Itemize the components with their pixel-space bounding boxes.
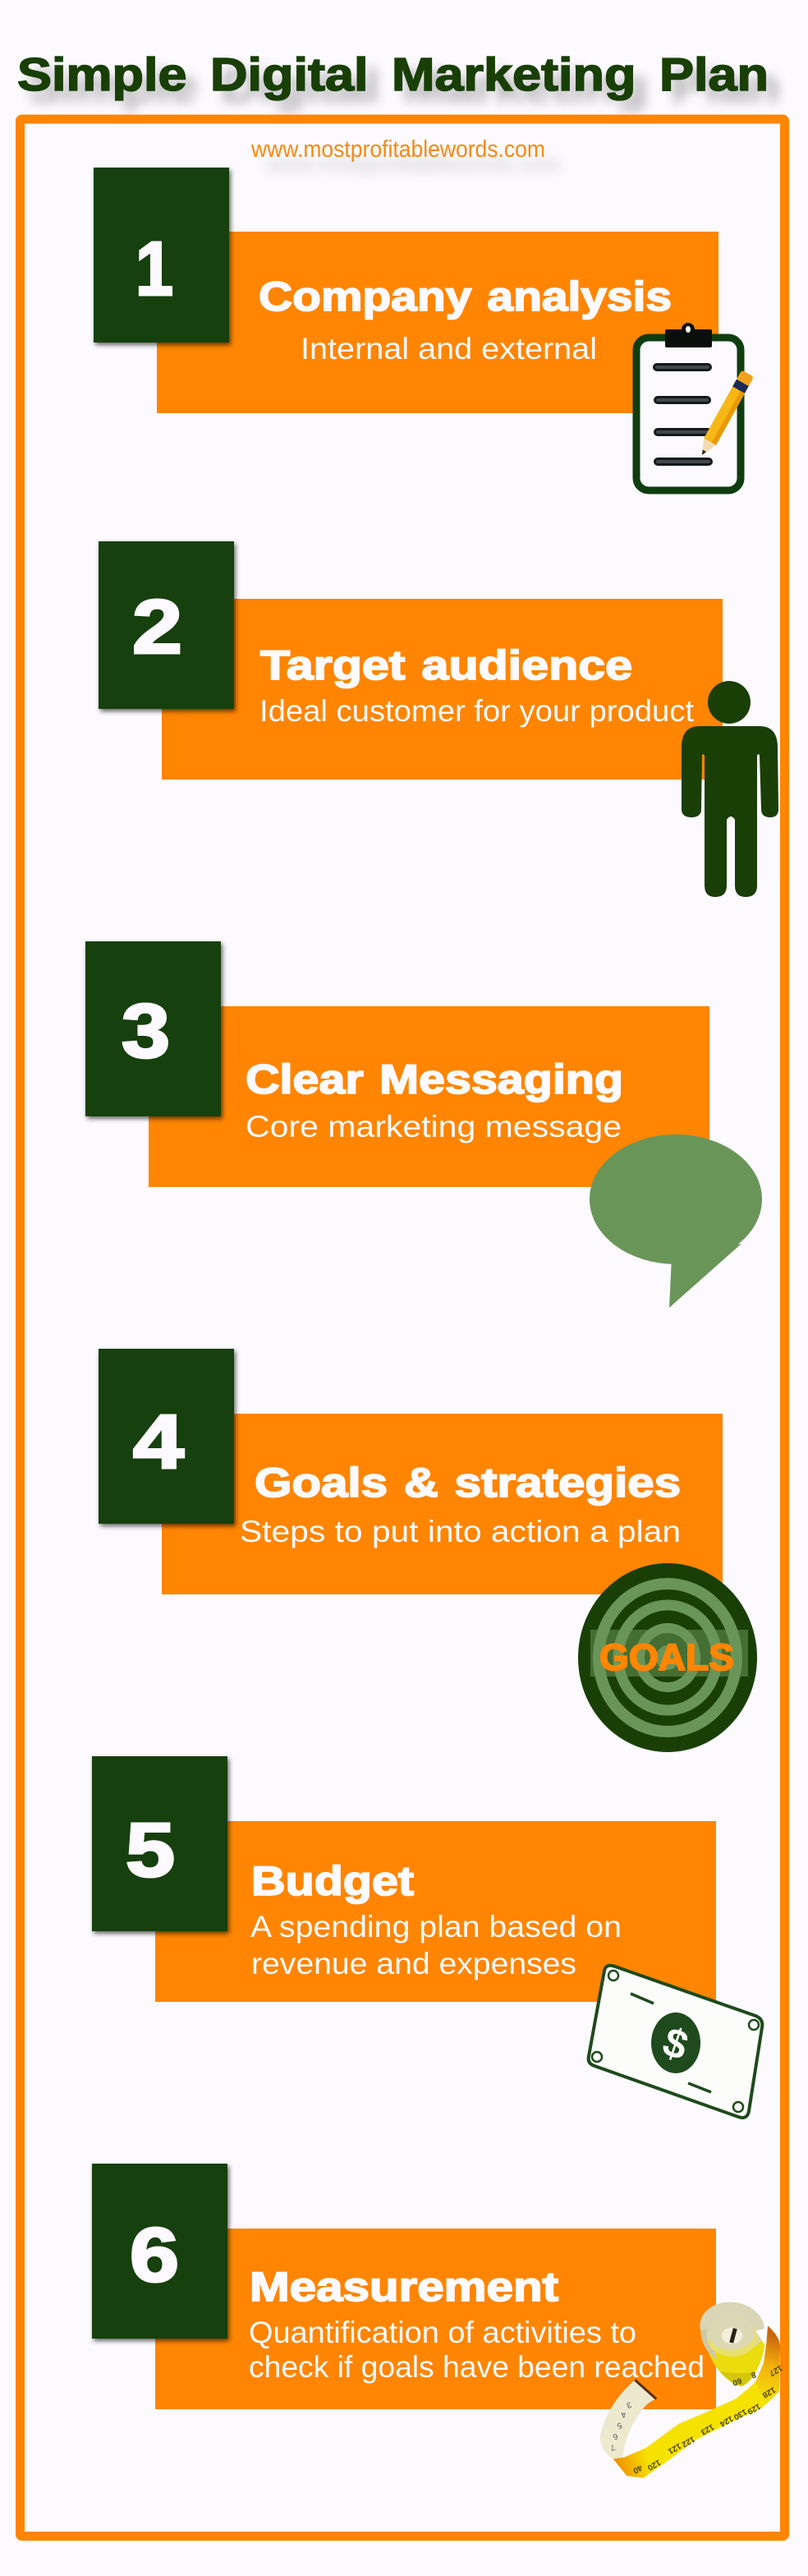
orange box 3 [149,1006,709,1187]
icon: goals target: GOALS [599,1636,734,1678]
icon: measuring tape: 127 [767,2363,784,2378]
description 1: Internal and external [301,332,597,366]
icon: measuring tape: 128 [760,2385,777,2399]
icon: measuring tape: 120 [645,2458,662,2472]
icon: clipboard with pencil [636,323,754,490]
heading 4: Goals & strategies [255,1460,681,1506]
heading 2: Target audience [260,642,632,688]
icon: measuring tape: 60 [731,2376,743,2387]
orange box 2 [162,599,723,780]
panel: step 6 measurement: check if goals have been reached [249,2350,705,2384]
description 6: Quantification of activities to [249,2316,636,2349]
icon: measuring tape: 122 [680,2434,696,2449]
number block 6: 6 [130,2212,179,2298]
icon: measuring tape [600,2298,784,2478]
panel: step 1 company analysis [94,168,718,413]
orange box 1 [157,232,718,413]
icon: measuring tape: 123 [699,2422,715,2436]
icon: goals target [578,1563,757,1752]
icon: measuring tape: 3 [625,2399,632,2410]
icon: measuring tape: 6 [611,2431,619,2441]
number block 2: 2 [132,584,182,669]
description 2: Ideal customer for your product [259,694,695,728]
number block 5 [92,1756,227,1931]
orange box 5 [155,1821,716,2002]
icon: measuring tape: 40 [631,2463,644,2475]
icon: measuring tape: 5 [615,2420,623,2431]
icon: measuring tape: 121 [666,2441,682,2456]
number block 4: 4 [133,1399,184,1484]
panel: step 4 goals and strategies [99,1349,723,1594]
orange box 6 [155,2229,716,2409]
heading 1: Company analysis [259,274,672,320]
icon: measuring tape: 129 [746,2401,762,2416]
number block 1: 1 [135,226,173,311]
panel: step 2 target audience [99,541,723,780]
heading 6: Measurement [250,2264,558,2310]
icon: dollar bill [589,1966,762,2118]
panel: step 6 measurement [92,2164,716,2409]
description 5: A spending plan based on [250,1910,622,1944]
description 4: Steps to put into action a plan [240,1515,681,1548]
number block 3: 3 [122,988,170,1074]
description 3: Core marketing message [246,1110,622,1143]
source url: www.mostprofitablewords.com [265,151,560,177]
number block 2 [99,541,234,709]
icon: measuring tape: 8 [750,2370,757,2380]
icon: measuring tape: 124 [718,2413,735,2428]
title: Simple Digital Marketing Plan [28,60,780,113]
panel: step 3 clear messaging [85,941,709,1187]
icon: measuring tape: 4 [619,2409,627,2419]
title: Simple Digital Marketing Plan [17,48,769,101]
orange box 4 [162,1414,723,1594]
number block 6 [92,2164,227,2339]
source url: www.mostprofitablewords.com [250,136,545,163]
panel: step 5 budget: revenue and expenses [251,1947,576,1980]
number block 5: 5 [126,1807,175,1893]
icon: measuring tape: 130 [732,2407,748,2422]
heading 3: Clear Messaging [246,1056,623,1102]
panel: step 5 budget [92,1756,716,2002]
icon: dollar bill: $ [657,2018,694,2069]
heading 5: Budget [251,1858,414,1904]
icon: speech bubble [590,1134,762,1308]
source url [250,136,560,177]
number block 1 [94,168,229,343]
icon: person [682,681,778,897]
icon: measuring tape: 7 [608,2442,616,2452]
number block 4 [99,1349,234,1524]
number block 3 [85,941,221,1116]
